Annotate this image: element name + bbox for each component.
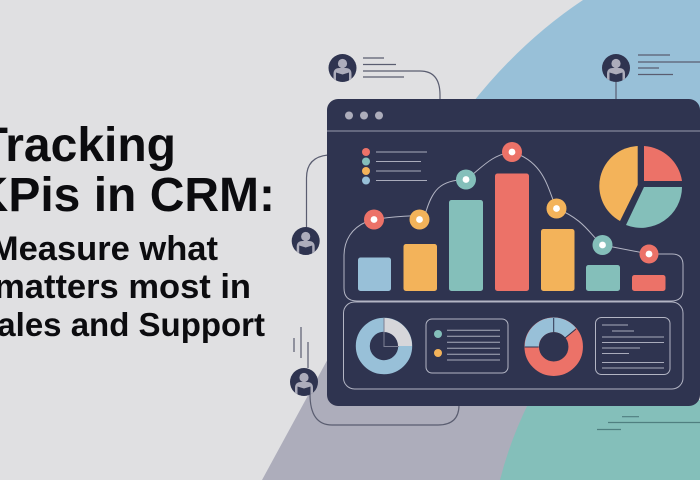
heading: subtitle [0, 230, 265, 343]
icon: user top left [328, 54, 356, 82]
heading: title [0, 119, 275, 222]
background shape: blue [470, 0, 700, 130]
legend [362, 148, 427, 184]
window header [327, 112, 700, 131]
icon: user top right [602, 54, 630, 82]
lower panel frame [344, 302, 683, 389]
trend nodes [364, 142, 658, 264]
donut chart left [363, 318, 412, 367]
trend line [344, 152, 683, 301]
background shape: teal [500, 400, 700, 480]
pie chart [599, 146, 682, 228]
background shape: grey [262, 355, 560, 480]
icon: user bottom left [290, 368, 318, 396]
icon: user middle left [292, 227, 320, 255]
donut chart right [525, 318, 576, 369]
list card left [426, 319, 508, 373]
panel: dashboard [327, 99, 700, 406]
decorative connectors and notes [294, 55, 700, 430]
text card right [596, 318, 670, 374]
bar chart [358, 174, 666, 291]
heading: subtitle: matters most in [0, 268, 251, 306]
